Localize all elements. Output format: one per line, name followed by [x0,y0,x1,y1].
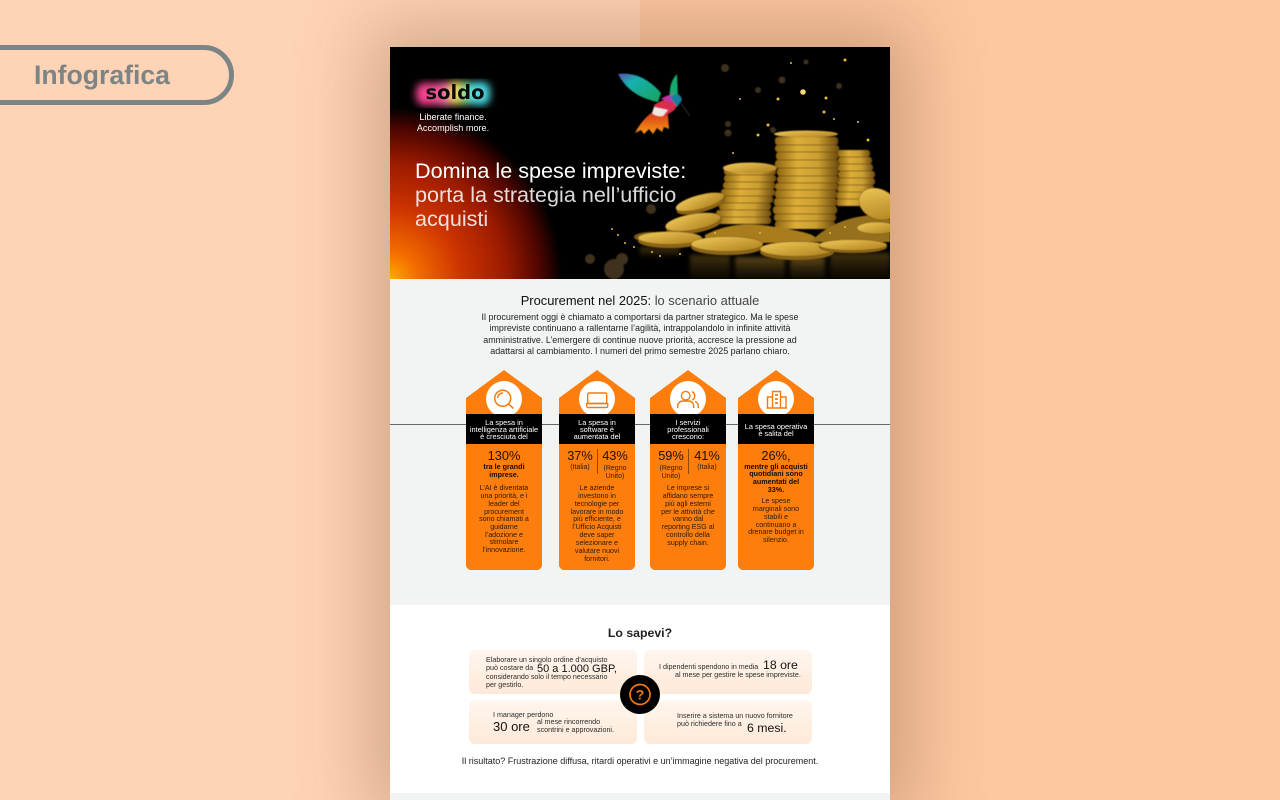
left stack [716,168,776,224]
fact: 30 hours: I manager perdono [493,711,553,719]
fact: 30 hours: 30 ore [493,719,530,734]
intro text [482,312,798,356]
card: operating spend: La spesa operativa [745,422,807,431]
gold dust mounds [705,224,815,244]
heading: Procurement nel 2025: lo scenario attuale [521,293,759,308]
card: software: selezionare e [576,539,618,547]
card: artificial intelligence: L’AI è diventata [480,484,528,492]
badge: Infografica [0,45,234,105]
card: artificial intelligence: sono chiamati a [479,515,529,523]
icon: buildings [758,381,794,417]
tagline: Accomplish more. [417,122,489,132]
card: artificial intelligence: stimolare [490,538,518,546]
card: operating spend: stabili e [764,513,788,521]
panel: procurement scenario [390,279,890,605]
card: software [559,370,635,570]
card: professional services [650,370,726,570]
fact: 30 hours [469,700,637,744]
card: software: software è [580,425,614,434]
card: professional services: vanno dal [673,515,703,523]
card: artificial intelligence [466,370,542,570]
card: artificial intelligence: tra le grandi [483,462,525,471]
card: operating spend [738,370,814,570]
loose coins [634,182,902,260]
card: operating spend: mentre gli acquisti [744,462,808,471]
card: professional services: professionali [667,425,709,434]
card: software: valutare nuovi [575,547,619,555]
heading: Lo sapevi?: Lo sapevi? [608,626,672,640]
next section strip [390,793,890,800]
card: software: fornitori. [584,555,610,563]
logo glow [416,81,490,106]
card: professional services: Le imprese si [667,484,709,492]
coin stacks [634,130,902,260]
hero title: porta la strategia nell’ufficio [415,182,676,207]
card: professional services: affidano sempre [663,492,713,500]
card: operating spend: drenare budget in [748,528,804,536]
infographic sheet [390,47,890,800]
card: artificial intelligence: leader del [488,500,520,508]
card: professional services: più agli esterni [665,500,711,508]
icon: question mark [620,675,660,714]
icon: people [670,381,706,417]
fact: order cost: Elaborare un singolo ordine d’acquisto [486,656,607,664]
hero artwork: gradient, coins and hummingbird [390,58,890,279]
fact: 18 hours: al mese per gestire le spese impreviste. [675,671,801,679]
card: artificial intelligence: guidarne [490,523,518,531]
card: professional services: per le attività che [661,508,715,516]
card: software: aumentata del [574,432,620,441]
hero title [415,158,686,231]
logo: soldo: soldo [425,81,485,104]
card: software: (Regno [604,465,626,472]
card: professional services: reporting ESG al [662,523,714,531]
card: software: La spesa in [578,418,616,427]
card: professional services: Unito) [662,473,680,480]
fact: order cost: 50 a 1.000 GBP, [537,663,617,675]
badge: Infografica: Infografica [34,60,170,90]
card: artificial intelligence: l’innovazione. [482,546,526,554]
reflections [640,247,890,279]
card: operating spend: 26%, [761,448,791,463]
card: artificial intelligence: una priorità, e i [481,492,527,500]
intro text: adattarsi al cambiamento. I numeri del primo semestre 2025 parlano chiaro. [490,346,790,356]
card: artificial intelligence: procurement [484,508,524,516]
card: software: più efficiente, e [573,515,621,523]
card: professional services: I servizi [675,418,701,427]
tagline: Liberate finance. [419,112,487,122]
card: software: deve saper [579,531,615,539]
card: professional services: (Italia) [697,464,717,471]
card: artificial intelligence: imprese. [489,470,519,479]
tagline [416,112,489,133]
card: operating spend: 33%. [768,485,784,494]
fact: 6 months: può richiedere fino a [677,720,742,728]
card: software: Le aziende [580,484,614,492]
card: operating spend: quotidiani sono [749,469,803,478]
icon: laptop [579,381,615,417]
card: artificial intelligence: è cresciuta del [480,432,528,441]
card: professional services: 41% [694,448,720,463]
intro text: amministrative. L’emergere di continue nuove priorità, accresce la pressione ad [483,335,797,345]
icon: question mark: ? [636,686,644,702]
card: artificial intelligence: 130% [488,448,520,463]
fact: order cost: per gestirlo. [486,681,523,689]
card: software: Unito) [606,473,624,480]
card: operating spend: è salita del [758,429,794,438]
intro text: Il procurement oggi è chiamato a comportarsi da partner strategico. Ma le spese [482,312,798,322]
card: artificial intelligence: La spesa in [485,418,523,427]
card: artificial intelligence: l’adozione e [485,531,523,539]
card: professional services: 59% [658,448,684,463]
card: operating spend: aumentati del [753,477,799,486]
card: software: 37% [567,448,593,463]
icon: magnifier [486,381,522,417]
right stack [836,150,875,206]
fact: order cost [469,650,637,694]
fact: 30 hours: al mese rincorrendo [537,718,600,726]
card: artificial intelligence: intelligenza artificiale [470,425,538,434]
card: professional services: crescono: [672,432,704,441]
card: operating spend: continuano a [756,521,796,529]
central stack [773,137,839,229]
result text: Il risultato? Frustrazione diffusa, ritardi operativi e un’immagine negativa del procurement. [462,756,818,766]
fact: order cost: considerando solo il tempo necessario [486,673,607,681]
card: professional services: controllo della [666,531,710,539]
hero title: acquisti [415,206,488,231]
card: software: lavorare in modo [571,508,623,516]
fact: 18 hours: 18 ore [763,658,798,672]
hummingbird [618,74,690,134]
fact: 18 hours [644,650,812,694]
card: operating spend: marginali sono [753,505,799,513]
card: software: 43% [602,448,628,463]
card: operating spend: silenzio. [763,536,789,544]
card: professional services: (Regno [660,465,682,472]
fact: 30 hours: scontrini e approvazioni. [537,726,614,734]
intro text: impreviste continuano a rallentarne l’agilità, intrappolandolo in infinite attività [489,323,791,333]
fact: order cost: può costare da [486,664,533,672]
timeline line [390,424,890,425]
card: software: investono in [578,492,616,500]
hero banner [390,47,890,279]
card: software: tecnologie per [575,500,619,508]
fact: 6 months: Inserire a sistema un nuovo fornitore [677,712,793,720]
background right half [640,0,1280,800]
fact: 18 hours: I dipendenti spendono in media [659,663,758,671]
card: operating spend: Le spese [762,497,790,505]
card: software: (Italia) [570,464,590,471]
fact: 6 months [644,700,812,744]
card: professional services: supply chain. [667,539,709,547]
sparkles [611,58,870,257]
card: software: l’Ufficio Acquisti [572,523,622,531]
fact: 6 months: 6 mesi. [747,721,787,735]
hero title: Domina le spese impreviste: [415,158,686,183]
